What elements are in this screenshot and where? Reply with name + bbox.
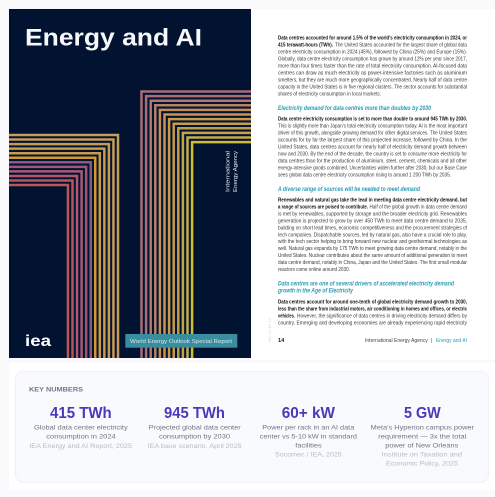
stat: 945 TWh: [148, 405, 242, 450]
report banner: World Energy Outlook Special Report: [130, 339, 232, 345]
rotated agency name: [226, 151, 239, 192]
stat: 5 GW: requirement — 3x the total: [378, 434, 467, 441]
paragraph: renewables and natural gas: reactors come online around 2030.: [278, 267, 350, 273]
paragraph: demand outlook to 2030: sees global data centre electricity consumption rising to around 1 200 TWh by 2035.: [278, 172, 451, 178]
paragraph: renewables and natural gas: is met by renewables, supported by storage and the broader electricity grid. Renewables: [278, 211, 467, 217]
section heading: drivers of demand: Data centres are one of several drivers of accelerated electricity demand: [278, 280, 454, 287]
paragraph: electricity consumption in 2024: smelters, but they are much more geographically concentrated. Nearly half of data centre: [278, 78, 467, 84]
paragraph: renewables and natural gas: well. Natural gas expands by 175 TWh to meet growing data centre demand, notably in the: [277, 246, 467, 252]
vertical page stamp: IEA. CC BY 4.0: [268, 318, 272, 342]
paragraph: one-tenth of demand growth: vehicles.: [278, 313, 295, 319]
nested square lines: right group: [142, 92, 251, 358]
paragraph: renewables and natural gas: Half of the global growth in data centre demand: [370, 204, 467, 210]
stat: 415 TWh: 415 TWh: [50, 405, 112, 422]
page footer: |: [431, 338, 433, 344]
stat: 5 GW: Institute on Taxation and: [382, 452, 462, 459]
paragraph: electricity consumption in 2024: more than four times faster than the rate of total electricity consumption. AI-focused data: [278, 64, 468, 70]
stat: 5 GW: Economic Policy, 2025: [386, 461, 458, 468]
section heading: drivers of demand: growth in the Age of Electricity: [277, 288, 353, 295]
stat: 60+ kW: Socomec / IEA, 2025: [275, 452, 342, 459]
paragraph: one-tenth of demand growth: [278, 300, 467, 326]
paragraph: demand outlook to 2030: data centres than for the production of aluminium, steel, cement, chemicals and all other: [278, 158, 467, 164]
stat: 5 GW: power of New Orleans: [385, 442, 459, 449]
paragraph: renewables and natural gas: generation is projected to grow by over 450 TWh to meet data centre demand to 2035,: [278, 218, 467, 224]
paragraph: renewables and natural gas: [277, 197, 467, 273]
stat: 60+ kW: Power per rack in an AI data: [262, 425, 355, 432]
paragraph: renewables and natural gas: data centre demand, notably in China, Japan and the United States. The first small modular: [278, 260, 467, 266]
rotated agency name: Energy Agency: [233, 151, 239, 192]
nested square lines: left group: [9, 135, 118, 358]
section heading: demand doubles: Electricity demand for data centres more than doubles by 2030: [278, 105, 431, 112]
stat: 60+ kW: facilities: [295, 442, 322, 449]
paragraph: renewables and natural gas: a range of sources are poised to contribute.: [278, 204, 368, 210]
panel: report page text: [268, 35, 468, 344]
stat: 415 TWh: Global data center electricity: [34, 425, 128, 432]
stat: 415 TWh: consumption in 2024: [46, 434, 116, 441]
paragraph: renewables and natural gas: United States. Nuclear contributes about the same amount of additional generation to meet: [278, 253, 467, 259]
paragraph: renewables and natural gas: tech companies. Dispatchable sources, led by natural gas, also have a crucial role to play,: [278, 232, 467, 238]
stat: 60+ kW: [260, 405, 357, 459]
paragraph: demand outlook to 2030: now and 2030. By the end of the decade, the country is set to consume more electricity for: [278, 151, 467, 157]
paragraph: renewables and natural gas: building on short lead times, economic competitiveness and the procurement strategies of: [278, 225, 467, 231]
stat: 5 GW: Meta's Hyperion campus power: [371, 425, 475, 432]
page footer: [278, 338, 467, 344]
stat: 415 TWh: [29, 405, 132, 450]
cover title: Energy and AI: [25, 24, 202, 52]
stat: 415 TWh: IEA Energy and AI Report, 2025: [29, 443, 132, 450]
paragraph: one-tenth of demand growth: country. Emerging and developing economies are already experiencing rapid electricity: [278, 320, 467, 326]
stat: 945 TWh: Projected global data center: [149, 425, 242, 432]
paragraph: demand outlook to 2030: driver of this growth, alongside growing demand for other digital services. The United States: [278, 131, 467, 137]
page footer: International Energy Agency: [365, 338, 428, 344]
paragraph: renewables and natural gas: with the tech sector helping to bring forward new nuclear and geothermal technologies as: [277, 239, 467, 245]
paragraph: demand outlook to 2030: United States, data centres account for nearly half of electricity demand growth between: [278, 144, 467, 150]
report banner: [125, 334, 237, 348]
paragraph: electricity consumption in 2024: shares of electricity consumption in local markets.: [278, 92, 381, 98]
panel: key numbers card: [16, 372, 488, 482]
stat: 945 TWh: IEA base scenario, April 2025: [148, 443, 242, 450]
paragraph: electricity consumption in 2024: centres can draw as much electricity as power-intensive factories such as aluminium: [278, 71, 467, 77]
panel: report cover: [9, 9, 251, 358]
section heading: diverse sources: A diverse range of sources will be needed to meet demand: [277, 186, 420, 193]
section heading: drivers of demand: [277, 280, 454, 295]
IEA logo: iea: [25, 333, 51, 350]
paragraph: electricity consumption in 2024: centre electricity consumption in 2024 (45%), followed by China (25%) and Europe (15%).: [278, 50, 467, 56]
rotated agency name: International: [226, 151, 232, 192]
paragraph: demand outlook to 2030: [278, 117, 467, 178]
paragraph: demand outlook to 2030: accounts for by far the largest share of this projected increase, followed by China. In the: [278, 138, 467, 144]
stat: 60+ kW: center vs 5-10 kW in standard: [260, 434, 357, 441]
stat: 945 TWh: consumption by 2030: [159, 434, 230, 441]
page footer: Energy and AI: [436, 338, 467, 344]
stat: 60+ kW: 60+ kW: [282, 405, 336, 422]
paragraph: electricity consumption in 2024: capacity in the United States is in five regional clusters. The sector accounts for substantial: [278, 85, 467, 91]
page footer: 14: [278, 338, 285, 344]
card heading: KEY NUMBERS: [29, 386, 84, 393]
paragraph: electricity consumption in 2024: [278, 35, 468, 98]
paragraph: one-tenth of demand growth: However, the significance of data centres in driving electricity demand differs by: [297, 313, 467, 319]
stat: 5 GW: [371, 405, 475, 468]
stat: 5 GW: 5 GW: [404, 405, 442, 422]
paragraph: electricity consumption in 2024: 415 terawatt-hours (TWh).: [278, 43, 333, 49]
paragraph: electricity consumption in 2024: The United States accounted for the largest share of global data: [335, 43, 468, 49]
stat: 945 TWh: 945 TWh: [164, 405, 225, 422]
